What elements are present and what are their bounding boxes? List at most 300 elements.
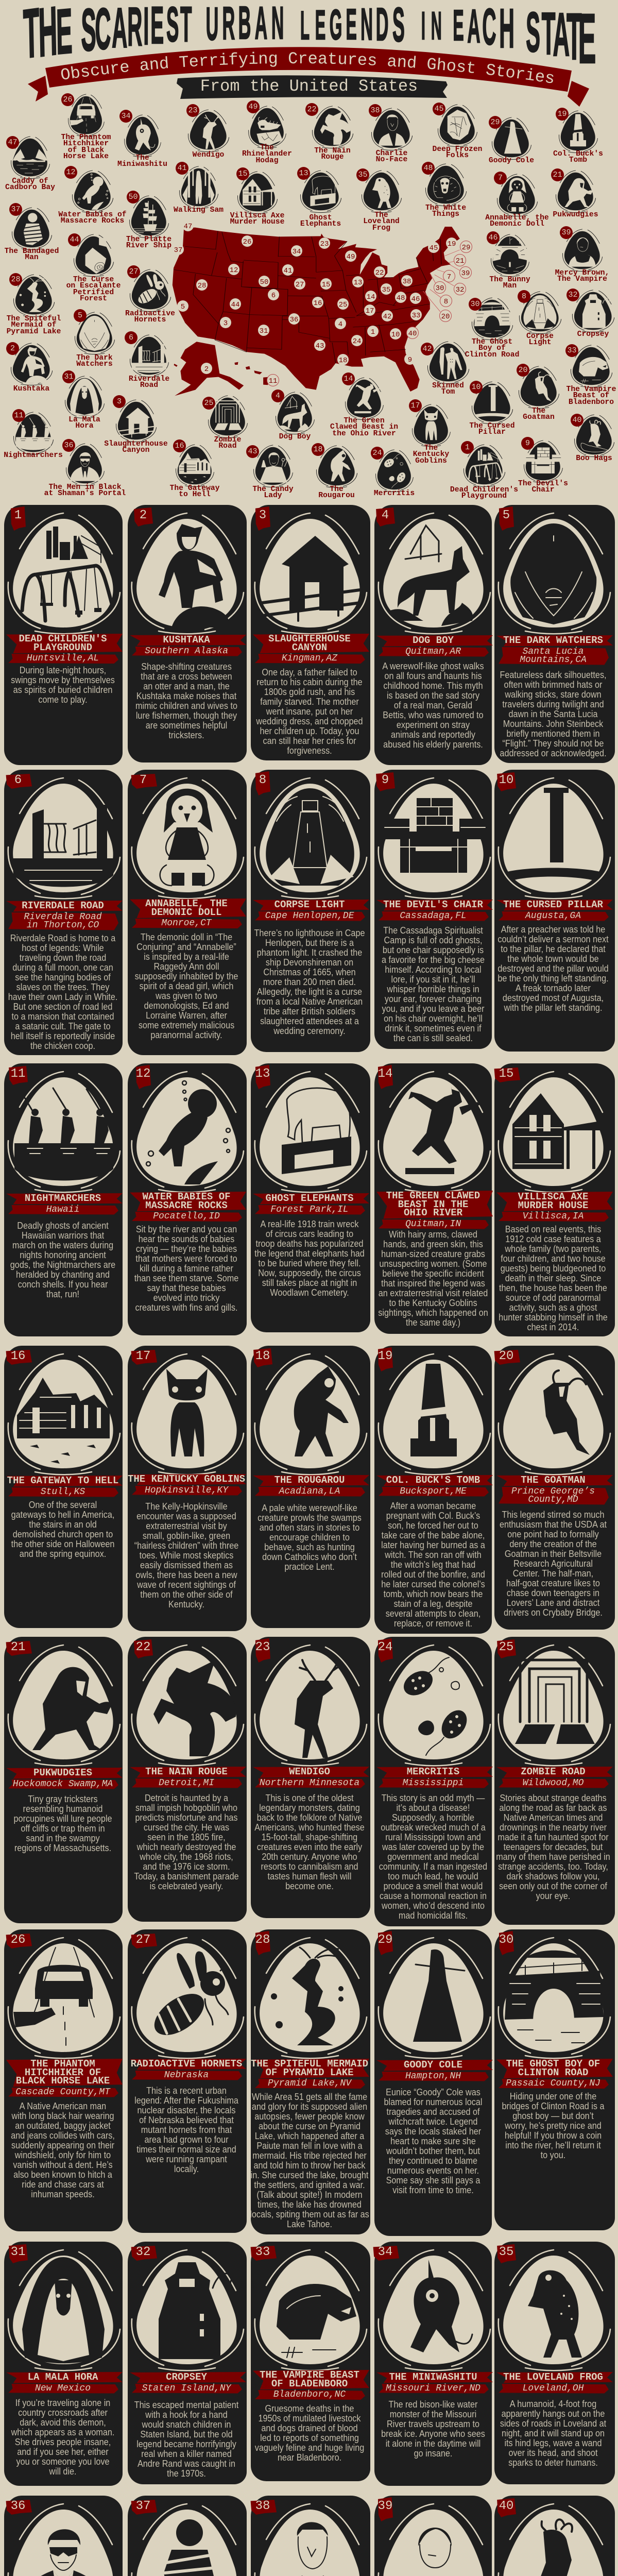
icon: 30 The Ghost Boy of Clinton Road: Clinton Road xyxy=(465,351,519,359)
panel: card 9: THE DEVIL'S CHAIR xyxy=(383,899,483,910)
map markers: 1 xyxy=(371,328,375,336)
panel: card 5: THE DARK WATCHERS xyxy=(503,635,603,646)
panel: card 7: Raggedy Ann doll xyxy=(153,961,219,972)
text: 42 xyxy=(422,345,432,353)
panel: card 26: with long black hair wearing xyxy=(11,2111,114,2121)
icon: 17 The Kentucky Goblins xyxy=(413,405,449,464)
panel: card 26: HITCHHIKER OF xyxy=(25,2067,101,2078)
panel: card 1: come to play. xyxy=(38,694,88,705)
panel: card 14: Quitman,IN xyxy=(405,1219,461,1229)
map markers: 41 xyxy=(284,267,292,275)
panel: card 23: 15-foot-tall, shape-shifting xyxy=(262,1832,357,1842)
panel: card 13 xyxy=(251,1063,370,1332)
panel: card 33: and dogs drained of blood xyxy=(261,2423,358,2433)
panel: card 26: Cascade County,MT xyxy=(15,2087,110,2097)
panel: card 33: Gruesome deaths in the xyxy=(265,2403,354,2414)
panel: card 10: After a preacher was told he xyxy=(501,924,605,935)
panel: card 17: Kentucky. xyxy=(168,1599,204,1609)
panel: card 29: Some say she still pays a xyxy=(386,2175,480,2185)
panel: card 1: as spirits of buried children xyxy=(13,685,112,695)
panel: card 26: A Native American man xyxy=(20,2101,106,2111)
panel: card 23: legendary monsters, dating xyxy=(259,1803,360,1813)
icon: 34 The Miniwashitu: Miniwashitu xyxy=(117,160,167,168)
icon: 5 The Dark Watchers: Watchers xyxy=(76,360,113,368)
panel: card 7: Lorraine Warren, after xyxy=(146,1010,227,1021)
icon: 1 Dead Children's Playground: Playground xyxy=(461,492,507,500)
panel: card 11: march on the waters during xyxy=(12,1240,113,1250)
panel: card 13: the legend that elephants had xyxy=(254,1248,365,1259)
panel: card 1: Huntsville,AL xyxy=(27,653,99,664)
icon: 17 The Kentucky Goblins: 17 xyxy=(410,401,420,410)
panel: card 26: THE PHANTOM xyxy=(30,2058,95,2070)
panel: card 18: and often stars in stories to xyxy=(260,1522,359,1533)
panel: card 1: swings move by themselves xyxy=(11,675,115,685)
icon: 36 The Men in Black: The Men in Black xyxy=(48,483,122,492)
icon: 43 The Candy Lady: The Candy xyxy=(252,485,294,494)
panel: card 10: 10 xyxy=(499,773,513,787)
panel: card 7: is inspired by a real-life xyxy=(144,952,229,962)
panel: card 35: 35 xyxy=(499,2245,513,2259)
panel: card 35: sparks to deter humans. xyxy=(508,2458,598,2468)
title: I xyxy=(421,5,425,48)
panel: card 30: CLINTON ROAD xyxy=(518,2067,588,2078)
panel: card 4: is based on the sad story xyxy=(387,690,479,701)
icon: 17 The Kentucky Goblins: The xyxy=(424,444,438,452)
icon: 7 Annabelle the Demonic Doll xyxy=(498,175,536,228)
panel: card 23: become one. xyxy=(285,1881,334,1891)
map markers xyxy=(173,220,472,386)
panel: card 5: Santa Lucia xyxy=(523,646,583,656)
icon: 29 Goody Cole xyxy=(489,116,534,165)
panel: card 30: Hiding under one of the xyxy=(510,2091,596,2102)
panel: card 1: 1 xyxy=(14,509,22,522)
panel: card 3: One day, a father failed to xyxy=(262,667,357,677)
title: G xyxy=(330,1,342,49)
panel: card 18: creature prowls the swamps xyxy=(258,1513,362,1523)
panel: card 14: unsuspecting women. (Some xyxy=(380,1259,487,1269)
panel: card 18: practice Lent. xyxy=(284,1562,335,1572)
panel: card 22: Detroit is haunted by a xyxy=(145,1793,228,1803)
panel: card 20: Goatman in their Beltsville xyxy=(505,1549,602,1559)
map markers: 19 xyxy=(448,240,456,248)
panel: card 17: extraterrestrial visit by xyxy=(146,1521,227,1531)
panel: card 9: lore, if you sit in it, he’ll xyxy=(391,974,475,985)
panel: card 3: Kingman,AZ xyxy=(282,653,337,664)
panel: card 6: in Thorton,CO xyxy=(27,920,99,930)
panel: card 28: Paiute man fell in love with a xyxy=(256,2141,363,2151)
icon: 11 Nightmarchers xyxy=(14,413,52,459)
panel: card 11: NIGHTMARCHERS xyxy=(25,1193,101,1204)
panel: card 32: Andre Rand was caught in xyxy=(138,2459,235,2469)
panel: card 31: and if you see her, either xyxy=(17,2447,109,2457)
panel: card 31: 31 xyxy=(11,2245,25,2259)
panel: card 18: THE ROUGAROU xyxy=(274,1475,345,1486)
panel: card 24: too much lead, he would xyxy=(388,1871,478,1882)
panel: card 35: night, and it will stand up on xyxy=(502,2428,605,2438)
panel: card 7: some extremely malicious xyxy=(139,1020,234,1030)
icon: 28 The Spiteful Mermaid of Pyramid Lake: Mermaid of xyxy=(11,321,57,329)
panel: card 14: hands, and green skin, this xyxy=(383,1239,483,1249)
panel: card 17: small, goblin-like, green xyxy=(143,1531,230,1541)
panel: card 21: resembling humanoid xyxy=(23,1804,102,1814)
panel: card 28 xyxy=(251,1929,370,2234)
icon: 37 The Bandaged Man: The Bandaged xyxy=(5,247,59,256)
panel: card 21: off cliffs or trap them in xyxy=(21,1823,105,1834)
panel: card 8: phantom light. It crashed the xyxy=(257,947,362,958)
panel: card 7: Monroe,CT xyxy=(161,918,212,928)
panel: card 4: 4 xyxy=(382,509,389,522)
panel: card 28: While Area 51 gets all the fame xyxy=(252,2092,367,2102)
map markers: 46 xyxy=(411,295,420,303)
icon: 16 The Gateway to Hell: to Hell xyxy=(179,490,211,499)
icon: 27 Radioactive Hornets: Radioactive xyxy=(125,310,175,318)
map markers: 10 xyxy=(391,331,400,339)
panel: card 37 xyxy=(128,2496,247,2576)
panel: card 5: walking sticks, stare down xyxy=(505,689,602,700)
icon: 24 Mercritis: Mercritis xyxy=(374,489,415,498)
panel: card 12: hear the sounds of babies xyxy=(139,1234,234,1244)
panel: card 15: 1912 cold case features a xyxy=(505,1234,601,1244)
icon: 43 The Candy Lady xyxy=(254,446,291,499)
panel: card 40 xyxy=(494,2496,615,2576)
map of the United States with numbered markers xyxy=(172,223,472,396)
panel: card 25: your eye. xyxy=(536,1891,570,1901)
panel: card 18: 18 xyxy=(255,1349,270,1363)
panel: card 12: than see them starve. Some xyxy=(134,1273,238,1283)
panel: card 13: still takes place at night in xyxy=(262,1278,357,1288)
panel: card 20: Center. The half-man, xyxy=(513,1568,593,1579)
panel: card 11 xyxy=(4,1063,123,1336)
panel: card 6: hell itself is reportedly inside xyxy=(11,1031,115,1041)
panel: card 20: half-goat creature likes to xyxy=(506,1578,600,1588)
map markers: 28 xyxy=(198,282,206,290)
panel: card 8: Cape Henlopen,DE xyxy=(265,911,354,921)
panel: card 9: himself. According to local xyxy=(385,964,482,975)
icon: 11 Nightmarchers: Nightmarchers xyxy=(4,451,63,460)
panel: card 18: Acadiana,LA xyxy=(279,1486,340,1496)
panel: card 2: KUSHTAKA xyxy=(163,634,210,646)
text: 12 xyxy=(66,168,75,177)
panel: card 9: you, and if you leave a beer xyxy=(382,1004,485,1014)
panel: card 29: Hampton,NH xyxy=(405,2071,461,2081)
panel: card 28: the settlers, and ignited a war. xyxy=(254,2180,365,2190)
icon: 12 Water Babies of Massacre Rocks: Massacre Rocks xyxy=(61,217,124,225)
panel: card 24: women, who’d descend into xyxy=(382,1901,485,1911)
panel: card 35: Loveland,OH xyxy=(523,2383,583,2394)
panel: card 33: vaguely feline and huge living xyxy=(255,2443,364,2453)
panel: card 1 xyxy=(4,505,123,765)
panel: card 16: THE GATEWAY TO HELL xyxy=(7,1475,118,1486)
panel: card 34: 34 xyxy=(378,2245,392,2259)
panel: card 24: mad homicidal fits. xyxy=(399,1910,468,1921)
panel: card 6: RIVERDALE ROAD xyxy=(22,900,104,911)
icon: 15 Villisca Axe Murder House: Murder House xyxy=(230,218,284,226)
panel: card 9: but one chair supposedly is xyxy=(383,945,484,955)
panel: card 12: MASSACRE ROCKS xyxy=(145,1199,228,1211)
icon: 31 La Mala Hora: Hora xyxy=(75,422,94,430)
panel: card 7: paranormal activity. xyxy=(150,1030,222,1040)
panel: card 24: outbreak wrecked much of a xyxy=(381,1822,486,1833)
panel: card 2: tricksters. xyxy=(168,730,204,740)
panel: card 8: Christmas of 1665, when xyxy=(263,967,356,977)
icon: 49 The Rhinelander Hodag: The xyxy=(260,144,274,152)
panel: card 31: New Mexico xyxy=(35,2383,91,2394)
panel: card 28: OF PYRAMID LAKE xyxy=(265,2067,354,2078)
panel: card 7: was given to two xyxy=(156,991,217,1001)
panel: card 20: deny the creation of the xyxy=(509,1539,597,1549)
panel: card 11: Hawaiian warriors that xyxy=(22,1230,104,1241)
panel: card 32: the 1970s. xyxy=(167,2468,206,2479)
map markers: 49 xyxy=(347,253,355,261)
panel: card 5: addressed or acknowledged. xyxy=(500,748,607,758)
panel: card 3: SLAUGHTERHOUSE xyxy=(268,633,351,645)
icon: 3 Slaughterhouse Canyon: Canyon xyxy=(123,446,149,454)
panel: card 29: blamed for numerous local xyxy=(384,2097,482,2107)
panel: card 27: This is a recent urban xyxy=(146,2086,227,2096)
icon: 3 Slaughterhouse Canyon: Slaughterhouse xyxy=(104,440,168,448)
panel: card 11: Deadly ghosts of ancient xyxy=(17,1221,109,1231)
panel: card 17: them on the other side of xyxy=(140,1589,233,1600)
panel: card 24 xyxy=(374,1637,492,1926)
panel: card 23: Americans, who hunted these xyxy=(254,1822,365,1833)
icon: 3 Slaughterhouse Canyon xyxy=(117,401,155,454)
panel: card 32: 32 xyxy=(136,2245,150,2259)
panel: card 25 xyxy=(494,1637,615,1925)
panel: card 24: produce a smell that would xyxy=(384,1881,483,1891)
panel: card 33: 1950s of mutilated livestock xyxy=(258,2413,361,2424)
panel: card 29: heart to make sure she xyxy=(390,2136,476,2146)
panel: card 26: ride and chase cars at xyxy=(22,2179,104,2190)
map markers: 2 xyxy=(204,365,209,374)
panel: card 27: mutant hornets from that xyxy=(141,2125,232,2135)
panel: card 10: couldn’t deliver a sermon next xyxy=(497,934,609,944)
map markers: 50 xyxy=(260,278,268,286)
icon: 50 The Platte River Ship: 50 xyxy=(128,193,138,201)
panel: card 23: 20th century. Anyone who xyxy=(262,1852,357,1862)
panel: card 10: to the pillar, he declared that xyxy=(501,944,606,954)
icon: 32 Cropsey: Cropsey xyxy=(577,330,609,338)
icon: 33 The Vampire Beast of Bladenboro: Bladenboro xyxy=(569,398,614,406)
panel: card 10: with the pillar left standing. xyxy=(504,1003,602,1013)
panel: card 28: about the curse on Pyramid xyxy=(259,2121,360,2131)
icon: 48 The White Things xyxy=(422,162,467,218)
panel: card 15: then, the house has been the xyxy=(499,1283,607,1293)
icon: 13 Ghost Elephants: Ghost xyxy=(309,214,332,222)
panel: card 29: numerous events on her. xyxy=(387,2165,479,2176)
map markers: 7 xyxy=(447,273,451,281)
title: E xyxy=(453,2,464,50)
icon: 44 The Curse on Escalante Petrified Forest xyxy=(75,235,112,302)
dark pill: from the united states xyxy=(177,75,448,99)
icon: 42 Skinned Tom xyxy=(428,343,468,396)
panel: card 38: 38 xyxy=(255,2499,270,2513)
icon: 26 The Phantom Hitchhiker: Hitchhiker xyxy=(63,140,109,148)
panel: card 16: One of the several xyxy=(29,1500,97,1510)
panel: card 23: This is one of the oldest xyxy=(265,1793,354,1803)
panel: card 26: vanish without a dent. He’s xyxy=(13,2160,113,2170)
icon: 4 Dog Boy: 4 xyxy=(276,392,280,400)
panel: card 12: Sit by the river and you can xyxy=(136,1224,237,1234)
panel: card 25: strange accidents, too. Today, xyxy=(498,1861,608,1872)
icon: 22 The Nain Rouge: Rouge xyxy=(321,153,344,161)
map markers: 14 xyxy=(367,293,375,301)
panel: card 8: from a local Native American xyxy=(256,996,363,1007)
icon: 38 Charlie No-Face: 38 xyxy=(370,106,380,115)
panel: card 35: apparently hangs out on the xyxy=(502,2409,605,2419)
panel: card 26: BLACK HORSE LAKE xyxy=(16,2075,110,2087)
map markers: 24 xyxy=(353,337,361,346)
panel: card 34: Missouri River,ND xyxy=(386,2383,480,2394)
map markers: 22 xyxy=(375,269,384,277)
title: E xyxy=(578,0,596,78)
panel: card 27: 27 xyxy=(136,1933,150,1947)
text: 49 xyxy=(248,103,258,111)
panel: card 5: often with brimmed hats or xyxy=(504,680,602,690)
panel: card 13: Woodlawn Cemetery. xyxy=(270,1287,349,1298)
panel: card 22: small impish hobgoblin who xyxy=(135,1803,237,1813)
panel: card 24: This story is an odd myth — xyxy=(382,1793,485,1803)
panel: card 27: Nebraska xyxy=(164,2070,209,2080)
panel: card 30: to you. xyxy=(541,2150,565,2160)
panel: card 20: Lovers’ Lane and distract xyxy=(507,1598,599,1608)
icon: 48 The White Things: 48 xyxy=(423,164,433,173)
panel: card 30: Passaic County,NJ xyxy=(506,2078,600,2089)
text: 43 xyxy=(248,447,258,456)
panel: card 2 xyxy=(128,505,247,762)
panel: card 39: 39 xyxy=(378,2499,392,2513)
map markers: 31 xyxy=(260,327,268,335)
panel: card 11: that, run! xyxy=(46,1289,79,1299)
panel: card 7: DEMONIC DOLL xyxy=(151,907,221,918)
panel: card 28: and told him to throw her back xyxy=(253,2160,366,2171)
panel: card 33: Bladenboro,NC xyxy=(273,2389,346,2400)
panel: card 35: its hind legs, wave a wand xyxy=(504,2438,602,2448)
panel: card 18: behave, such as hunting xyxy=(264,1542,355,1552)
panel: card 5: briefly mentioned them in xyxy=(506,728,599,739)
map markers: 6 xyxy=(271,292,276,300)
panel: card 15: Based on real events, this xyxy=(505,1224,601,1234)
panel: card 12: evolved into tricky xyxy=(153,1293,219,1303)
map markers: 26 xyxy=(243,238,251,246)
panel: card 16: Stull,KS xyxy=(41,1487,85,1497)
icon: 26 The Phantom Hitchhiker: of Black xyxy=(68,146,104,155)
icon: 35 The Loveland Frog: The xyxy=(374,211,388,219)
panel: card 38 xyxy=(251,2496,370,2576)
icon: 50 The Platte River Ship: The Platte xyxy=(126,235,171,244)
panel: card 14: human-sized creature grabs xyxy=(381,1249,485,1259)
map markers: 45 xyxy=(430,244,438,252)
panel: card 7: The demonic doll in “The xyxy=(141,932,232,942)
dark pill: from the united states: From the United States xyxy=(200,77,418,96)
panel: card 14: an extraterrestrial visit related xyxy=(379,1288,488,1298)
panel: card 15: four children, and two house xyxy=(501,1253,606,1264)
icon: 23 Wendigo xyxy=(186,104,229,159)
panel: card 2: lure fishermen, though they xyxy=(136,710,237,721)
panel: card 14: With hairy arms, clawed xyxy=(389,1229,477,1240)
icon: 9 The Devil's Chair: 9 xyxy=(525,439,530,448)
icon: 15 Villisca Axe Murder House xyxy=(230,167,284,226)
icon: 28 The Spiteful Mermaid of Pyramid Lake: The Spiteful xyxy=(7,315,61,323)
icon: 28 The Spiteful Mermaid of Pyramid Lake xyxy=(14,276,53,335)
title: S xyxy=(526,1,540,64)
map markers: 8 xyxy=(444,298,448,306)
icon: 15 Villisca Axe Murder House: 15 xyxy=(238,170,247,178)
panel: card 23: 23 xyxy=(255,1640,270,1654)
panel: card 8: more than 200 men died. xyxy=(263,977,356,987)
panel: card 10: THE CURSED PILLAR xyxy=(503,899,603,910)
icon: 47 Caddy of Cadboro Bay: Caddy of xyxy=(12,177,48,185)
panel: card 8: wedding ceremony. xyxy=(273,1026,346,1036)
icon: 38 Charlie No-Face xyxy=(369,104,413,164)
icon: 31 La Mala Hora: La Mala xyxy=(68,416,100,424)
icon: 35 The Loveland Frog: Frog xyxy=(372,224,390,232)
panel: card 32: Staten Island,NY xyxy=(142,2383,231,2394)
icon: 7 Annabelle the Demonic Doll: 7 xyxy=(498,174,503,182)
panel: card 35: A humanoid, 4-foot frog xyxy=(510,2399,596,2409)
panel: card 3: CANYON xyxy=(292,642,327,653)
panel: card 15: whole family (two parents, xyxy=(505,1244,602,1254)
panel: card 24: rural Mississippi town and xyxy=(385,1832,481,1842)
panel: card 10: be the only thing left standing. xyxy=(497,973,609,984)
panel: card 3: forgiveness. xyxy=(287,745,332,756)
icon: 39 Mercy Brown, The Vampire: Mercy Brown, xyxy=(555,269,609,277)
panel: card 9: whisper horrible things in xyxy=(387,984,479,994)
icon: 34 The Miniwashitu: 34 xyxy=(121,112,131,121)
panel: card 3: can still hear her cries for xyxy=(263,736,356,746)
icon: 1 Dead Children's Playground: Dead Children's xyxy=(450,486,518,494)
panel: card 13: of circus cars leading to xyxy=(266,1229,353,1239)
panel: card 21 xyxy=(4,1637,123,1923)
icon: 26 The Phantom Hitchhiker: Horse Lake xyxy=(63,152,109,161)
panel: card 7: supposedly inhabited by the xyxy=(135,971,238,981)
panel: card 6: see the hanging bodies of xyxy=(15,972,111,982)
title: T xyxy=(566,0,582,74)
icon: 2 Kushtaka: Kushtaka xyxy=(13,385,49,393)
icon: 17 The Kentucky Goblins: Kentucky xyxy=(413,450,449,459)
panel: card 17: toes. While most skeptics xyxy=(140,1550,233,1561)
title: D xyxy=(376,0,388,50)
map markers: 40 xyxy=(408,330,417,338)
map markers: 25 xyxy=(339,301,347,309)
panel: card 6: during a full moon, one can xyxy=(12,962,113,973)
panel: card 26: 26 xyxy=(11,1933,25,1947)
icon: 41 Walking Sam xyxy=(174,162,224,214)
icon: 30 The Ghost Boy of Clinton Road xyxy=(473,299,511,358)
panel: card 26 xyxy=(4,1929,123,2231)
icon: 14 The Green Clawed Beast: The Green xyxy=(344,417,385,425)
panel: card 31: If you’re traveling alone in xyxy=(15,2398,110,2408)
panel: card 8: tribe after British soldiers xyxy=(264,1006,355,1016)
panel: card 4: abused his elderly parents. xyxy=(383,739,483,750)
panel: card 21: regions of Massachusetts. xyxy=(14,1843,111,1853)
icon: 7 Annabelle the Demonic Doll: Demonic Doll xyxy=(490,220,544,228)
icon: 40 Boo Hags: 40 xyxy=(572,416,582,425)
panel: card 9: your ear, forever changing xyxy=(385,994,482,1004)
map markers: 15 xyxy=(322,281,330,289)
panel: card 10: destroyed most of Augusta, xyxy=(503,993,604,1003)
panel: card 4: DOG BOY xyxy=(413,635,454,646)
icon: 44 The Curse on Escalante Petrified Forest: Forest xyxy=(80,295,107,303)
icon: 2 Kushtaka xyxy=(12,344,51,393)
icon: 41 Walking Sam: 41 xyxy=(177,164,186,173)
panel: card 28: 28 xyxy=(255,1933,270,1947)
icon: 11 Nightmarchers: 11 xyxy=(14,411,24,420)
text: 23 xyxy=(188,106,198,115)
panel: card 5: “Flight.” They should not be xyxy=(503,738,604,749)
icon: 13 Ghost Elephants: 13 xyxy=(299,169,308,178)
panel: card 32: CROPSEY xyxy=(166,2371,207,2383)
panel: card 6: have their own Lady in White. xyxy=(8,992,117,1002)
